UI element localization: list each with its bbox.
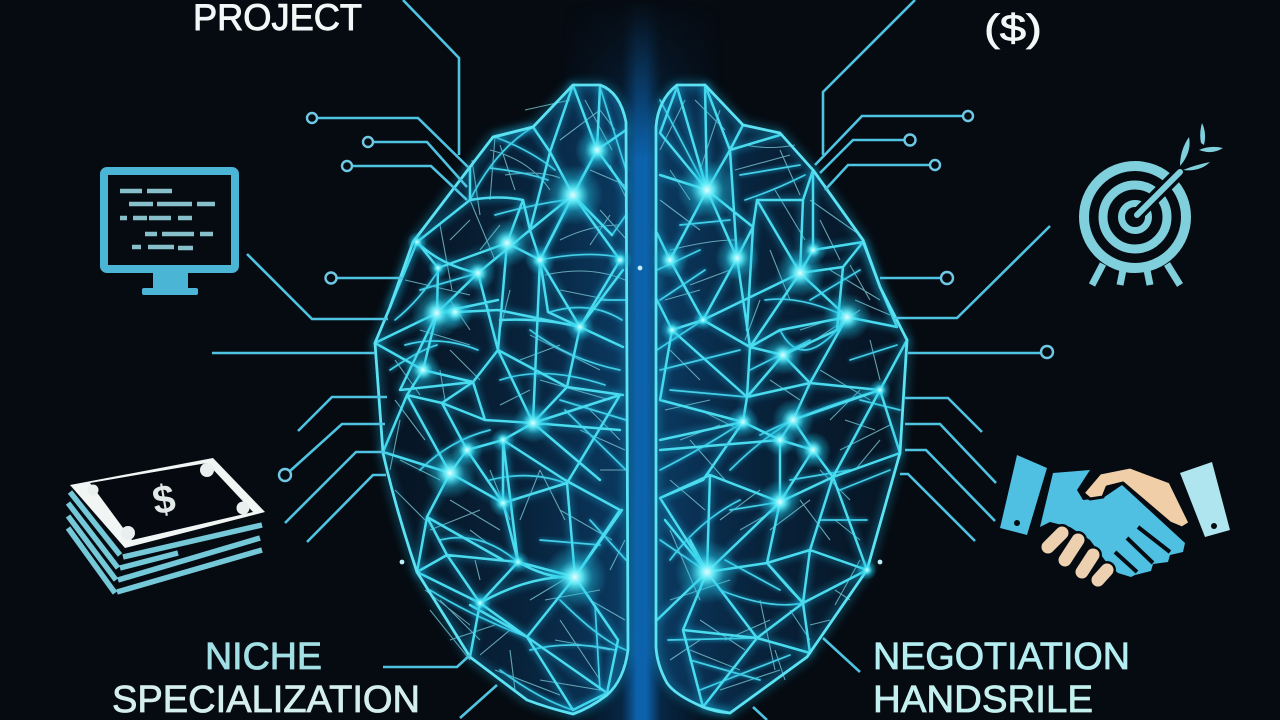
finger separators <box>1115 527 1170 572</box>
icon: handshake <box>1000 455 1230 580</box>
left thin connections <box>390 100 627 695</box>
label: niche specialization <box>112 636 420 720</box>
left circuit connector lines <box>212 0 497 718</box>
left hemisphere fill <box>375 85 628 714</box>
right mid connections <box>657 100 900 690</box>
bill stack edges <box>68 492 262 593</box>
right thin connections <box>660 100 890 690</box>
right brain hemisphere <box>652 85 907 713</box>
label: niche specialization: SPECIALIZATION <box>112 679 420 720</box>
right glowing nodes <box>652 160 891 604</box>
blue hand <box>1040 470 1185 577</box>
right circuit connector lines <box>753 0 1053 720</box>
right cuff <box>1180 462 1230 537</box>
label: niche specialization: NICHE <box>205 636 322 678</box>
heading: dollar symbol: ($) <box>984 8 1042 50</box>
target legs <box>1092 264 1180 285</box>
central blue light column <box>572 9 712 720</box>
left neural mesh <box>375 85 626 710</box>
left brain outline <box>375 85 628 714</box>
dollar sign: $ <box>149 476 179 524</box>
label: negotiation handskill <box>873 636 1130 720</box>
top bill <box>70 458 265 548</box>
bill corner marks <box>88 463 250 540</box>
left cuff <box>1000 455 1047 535</box>
skin-tone fingers <box>1048 533 1107 580</box>
icon: computer monitor with code <box>104 171 235 295</box>
left glowing nodes <box>405 128 632 614</box>
icon: stack of dollar bills <box>68 458 265 593</box>
left mid connections <box>390 87 626 710</box>
right neural mesh <box>657 85 907 713</box>
label: negotiation handskill: HANDSRILE <box>873 679 1093 720</box>
skin-tone hand <box>1083 467 1190 528</box>
left brain hemisphere <box>375 85 632 714</box>
monitor code lines <box>120 191 215 248</box>
arrow feathers <box>1180 123 1223 170</box>
arrow <box>1136 172 1180 216</box>
right brain outline <box>656 85 907 713</box>
right hemisphere fill <box>656 85 907 713</box>
scattered light points <box>400 266 882 564</box>
icon: archery target with arrow <box>1084 123 1223 285</box>
label: negotiation handskill: NEGOTIATION <box>873 636 1130 678</box>
